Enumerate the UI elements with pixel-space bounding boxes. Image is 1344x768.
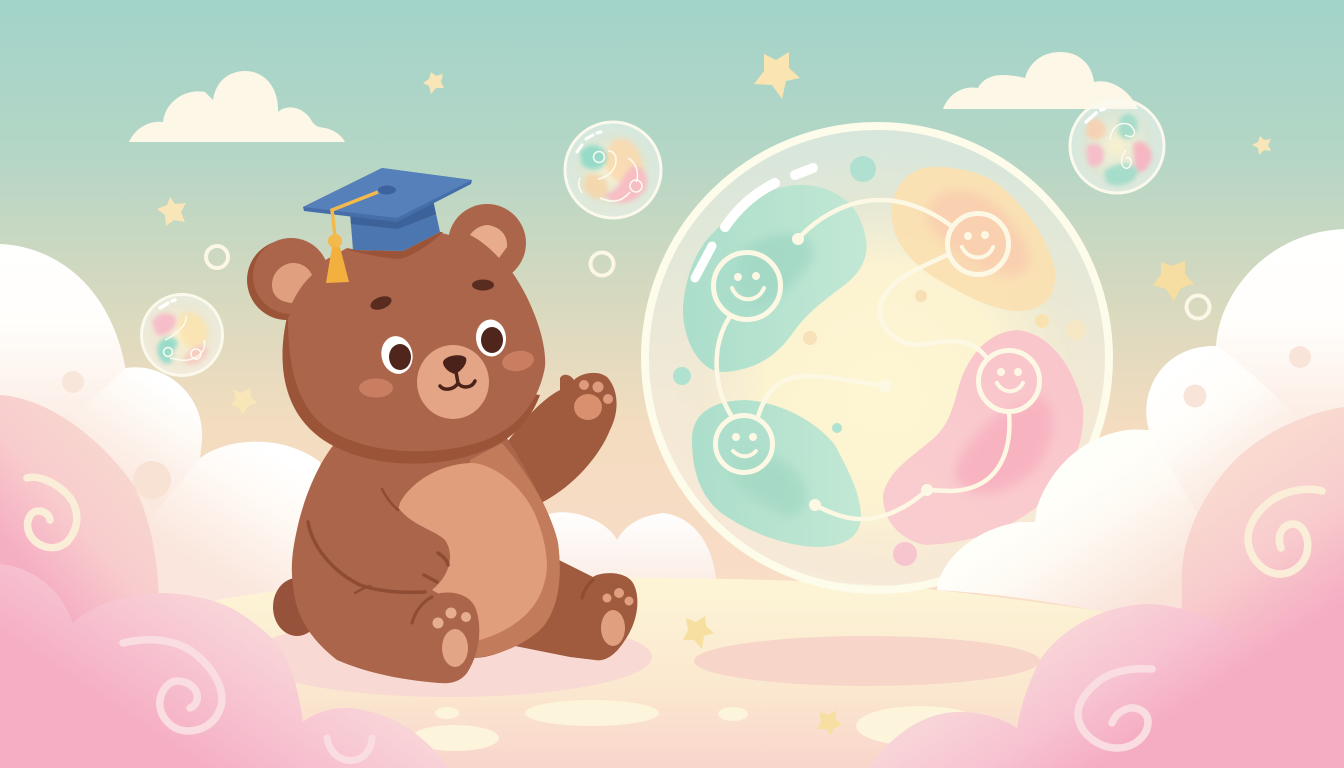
bubble highlights [695, 168, 813, 278]
swirl: bottom centre [327, 738, 372, 760]
bear: belly rim [470, 443, 560, 658]
cloud: top left [129, 71, 345, 142]
mini bubble: centre [565, 122, 661, 218]
stars [157, 52, 1271, 415]
muzzle [417, 345, 489, 419]
white cloud: right [937, 229, 1344, 625]
bear: back foot [273, 578, 321, 636]
white cloud: left [0, 244, 340, 610]
bubble decorative dots [673, 156, 1086, 566]
cheeks [359, 348, 535, 398]
swirl: bottom left [123, 640, 222, 731]
bear: head shadow [282, 317, 540, 464]
pink foreground clouds: right [870, 590, 1344, 768]
ground [179, 575, 1175, 768]
blob: green bottom-left [692, 400, 861, 547]
small rings [206, 246, 1210, 318]
nose and mouth [440, 355, 475, 389]
swirl: bottom right [1078, 669, 1152, 748]
bear: body creases [308, 489, 448, 593]
mini bubble: top right [1070, 99, 1164, 193]
swirl: top right [1248, 489, 1322, 574]
swirl: top left [27, 477, 77, 548]
blob: green top-left [683, 185, 867, 372]
graduation cap [303, 168, 472, 283]
bear [247, 168, 637, 683]
mini bubble: left [142, 294, 222, 376]
eyes [378, 318, 508, 377]
pink cloud: left back [0, 395, 159, 680]
pink cloud: right back [1181, 407, 1344, 680]
eyebrows [369, 280, 494, 312]
bear: body arm [340, 480, 450, 620]
main bubble [645, 126, 1109, 590]
ground shadows and puddles [248, 616, 1040, 751]
network end dots [792, 233, 933, 511]
bear: right leg [510, 558, 637, 660]
blob: yellow top-right [892, 167, 1055, 311]
bear: body [292, 428, 560, 683]
cloud: top right [943, 52, 1138, 109]
smiley nodes [714, 214, 1040, 472]
blob: pink bottom-right [883, 330, 1083, 545]
bear: head [288, 233, 545, 451]
bear: face [359, 280, 535, 419]
bear: belly [398, 463, 547, 640]
bear: raised arm [505, 373, 617, 502]
bear: ears [247, 204, 526, 320]
white cloud: centre [540, 512, 717, 590]
pink foreground clouds: left [0, 564, 448, 768]
network connections [717, 200, 1009, 519]
bubble rim [645, 126, 1109, 590]
bear: front foot [395, 592, 479, 683]
